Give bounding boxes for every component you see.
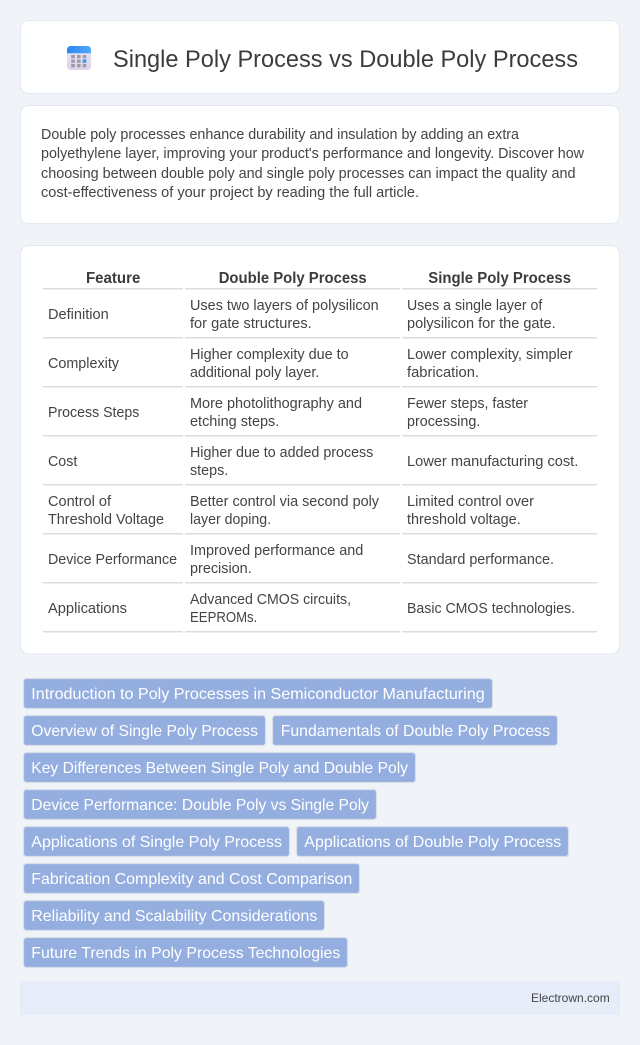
title: Single Poly Process vs Double Poly Process [113, 46, 578, 73]
tag: key differences: Key Differences Between Single Poly and Double Poly [31, 760, 408, 777]
tag: future trends [24, 938, 348, 968]
row: device performance: Improved performance and [190, 543, 363, 559]
row: control of threshold voltage: Threshold Voltage [48, 512, 164, 528]
row: complexity: Complexity [48, 356, 120, 372]
footer [20, 981, 620, 1015]
tag: introduction [24, 678, 492, 708]
row: cost: Lower manufacturing cost. [407, 454, 578, 470]
row: complexity: Lower complexity, simpler [407, 347, 573, 363]
row: definition: polysilicon for the gate. [407, 316, 556, 332]
tag: reliability and scalability [24, 900, 324, 930]
tag: overview of single poly: Overview of Single Poly Process [31, 723, 258, 740]
panel: introduction [20, 106, 620, 224]
row: complexity: additional poly layer. [190, 365, 319, 381]
tag: fundamentals of double poly [272, 716, 558, 746]
table header row: Single Poly Process [428, 270, 571, 287]
row: process steps: Process Steps [48, 405, 139, 421]
intro text: choosing between double poly and single poly processes can impact the quality and [41, 166, 576, 182]
row: definition [48, 298, 556, 332]
intro text: Double poly processes enhance durability and insulation by adding an extra [41, 127, 519, 143]
intro text [41, 127, 585, 201]
tag: applications of double poly: Applications of Double Poly Process [304, 834, 561, 851]
tag: introduction: Introduction to Poly Processes in Semiconductor Manufacturing [31, 686, 485, 703]
row: applications: Basic CMOS technologies. [407, 601, 575, 617]
table header row [86, 270, 571, 287]
row: device performance [48, 543, 554, 577]
row: applications: EEPROMs. [190, 610, 257, 626]
panel: title header [20, 20, 620, 94]
tag: fabrication complexity: Fabrication Complexity and Cost Comparison [31, 871, 352, 888]
row: process steps: Fewer steps, faster [407, 396, 528, 412]
table header row: Feature [86, 270, 140, 287]
tag: applications of single poly [24, 826, 290, 856]
row: applications: Advanced CMOS circuits, [190, 592, 351, 608]
tag: applications of single poly: Applications of Single Poly Process [31, 834, 282, 851]
tag: reliability and scalability: Reliability and Scalability Considerations [31, 908, 317, 925]
tag: overview of single poly [24, 716, 266, 746]
row: control of threshold voltage: threshold voltage. [407, 512, 521, 528]
row: control of threshold voltage [48, 494, 534, 528]
row: definition: Uses two layers of polysilicon [190, 298, 379, 314]
row: applications [48, 592, 575, 626]
row: control of threshold voltage: Control of [48, 494, 112, 510]
footer source: Electrown.com [531, 991, 610, 1005]
row: control of threshold voltage: Limited control over [407, 494, 534, 510]
table header row: Double Poly Process [219, 270, 367, 287]
icon: calendar [67, 46, 91, 70]
row: cost: steps. [190, 463, 228, 479]
row: device performance: precision. [190, 561, 252, 577]
tag: key differences [24, 752, 416, 782]
row: process steps: More photolithography and [190, 396, 362, 412]
row: definition: Uses a single layer of [407, 298, 543, 314]
row: complexity: Higher complexity due to [190, 347, 349, 363]
tag: fundamentals of double poly: Fundamentals of Double Poly Process [281, 723, 550, 740]
tag: applications of double poly [296, 826, 568, 856]
topic tags [24, 678, 568, 968]
row: process steps: etching steps. [190, 414, 279, 430]
tag: device performance [24, 790, 376, 820]
row: cost [48, 445, 578, 479]
row: control of threshold voltage: Better control via second poly [190, 494, 380, 510]
tag: fabrication complexity [24, 864, 360, 894]
row: definition: for gate structures. [190, 316, 312, 332]
intro text: polyethylene layer, improving your product's performance and longevity. Discover how [41, 146, 585, 162]
row: process steps [48, 396, 528, 430]
panel: comparison table [20, 246, 620, 654]
row: cost: Higher due to added process [190, 445, 373, 461]
intro text: cost-effectiveness of your project by reading the full article. [41, 185, 419, 201]
row: definition: Definition [48, 307, 109, 323]
tag: device performance: Device Performance: Double Poly vs Single Poly [31, 797, 369, 814]
row: device performance: Device Performance [48, 552, 177, 568]
tag: future trends: Future Trends in Poly Process Technologies [31, 945, 340, 962]
row: device performance: Standard performance. [407, 552, 554, 568]
row: complexity: fabrication. [407, 365, 479, 381]
row: cost: Cost [48, 454, 77, 470]
row: complexity [48, 347, 573, 381]
row: process steps: processing. [407, 414, 480, 430]
row: control of threshold voltage: layer doping. [190, 512, 271, 528]
row: applications: Applications [48, 601, 127, 617]
